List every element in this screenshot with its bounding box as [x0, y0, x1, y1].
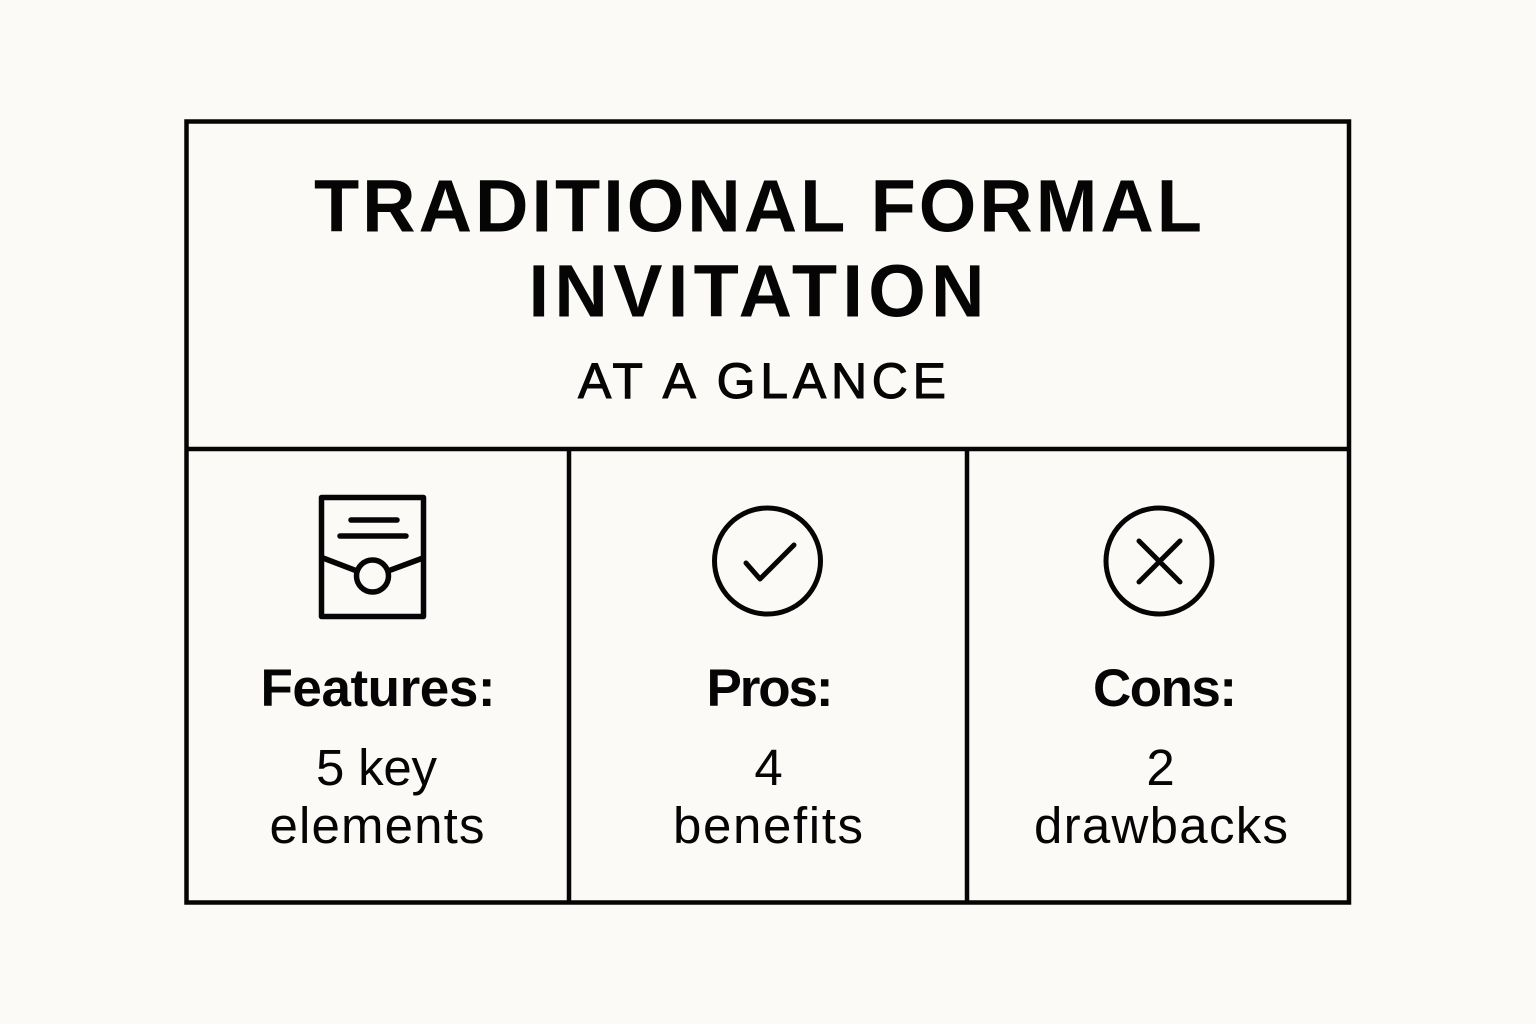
heading: pros: Pros: [706, 659, 834, 718]
title [314, 164, 1202, 332]
pros text [673, 739, 863, 854]
title: INVITATION [528, 250, 984, 332]
panel: pros [673, 508, 863, 854]
features text: 5 key [316, 739, 438, 796]
cons text: drawbacks [1034, 797, 1288, 854]
pros text: benefits [673, 797, 863, 854]
table frame [186, 122, 1349, 902]
icon: check mark in circle [714, 508, 820, 614]
features text: elements [270, 797, 484, 854]
heading: features: Features: [260, 659, 496, 718]
pros text: 4 [754, 739, 783, 796]
subtitle: AT A GLANCE [578, 353, 946, 409]
icon: cross in circle [1106, 508, 1212, 614]
panel: features [260, 498, 496, 854]
cons text: 2 [1146, 739, 1175, 796]
panel: cons [1034, 508, 1288, 854]
title: TRADITIONAL FORMAL [314, 164, 1202, 248]
icon: sealed invitation envelope [322, 498, 424, 616]
heading: cons: Cons: [1093, 659, 1237, 718]
features text [270, 739, 484, 854]
cons text [1034, 739, 1288, 854]
